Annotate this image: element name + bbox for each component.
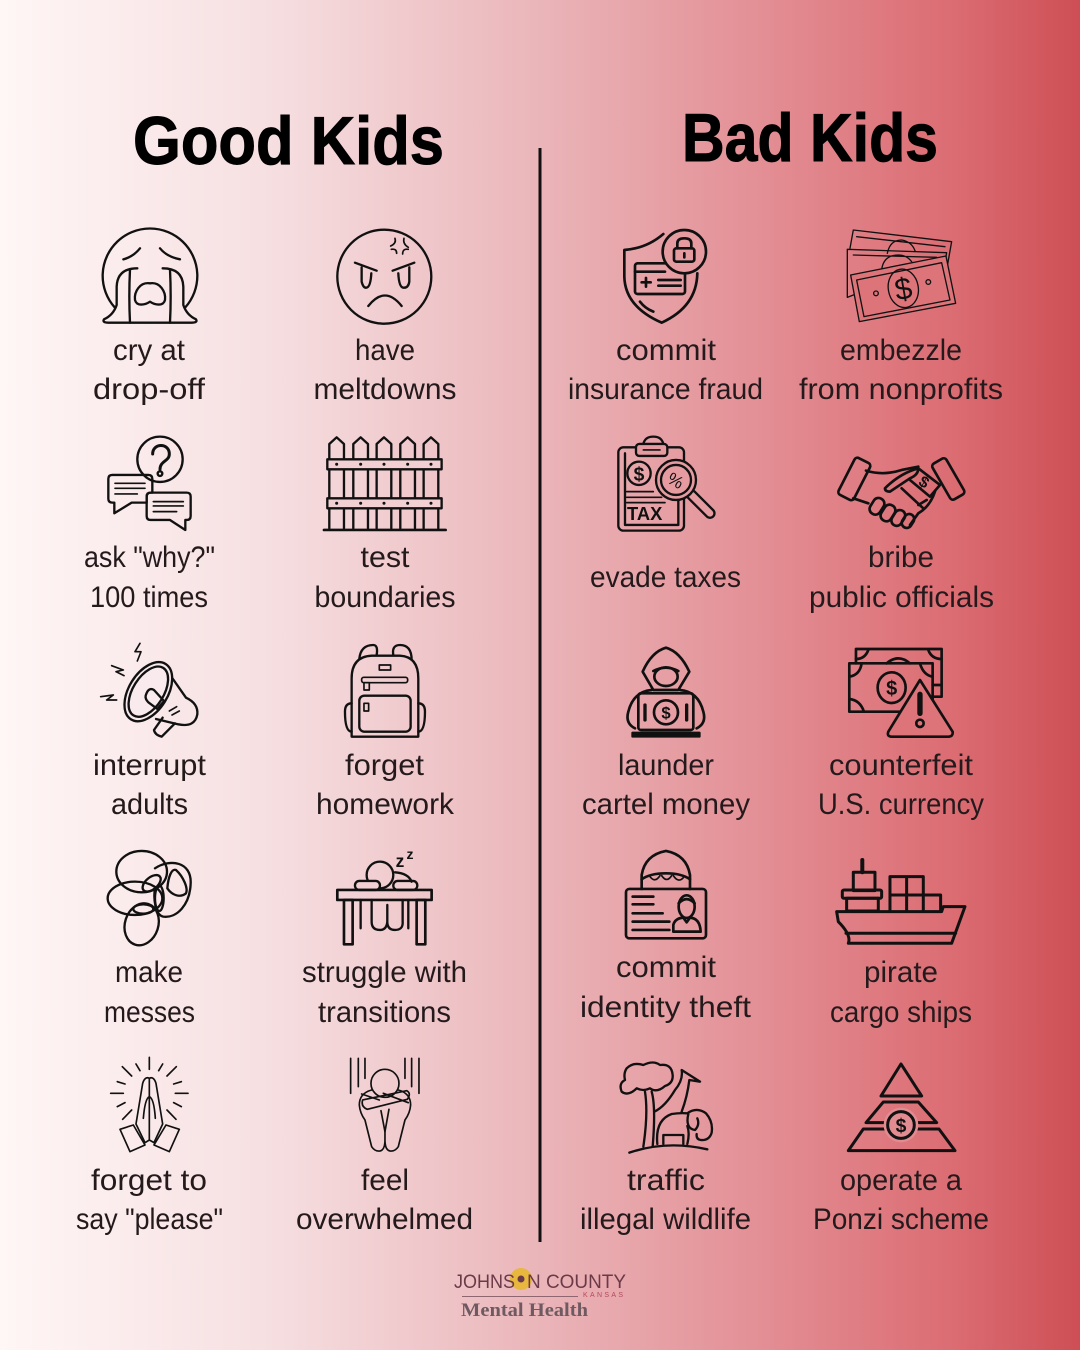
label: make messes: make: [115, 956, 183, 989]
label: feel overwhelmed: [296, 1164, 473, 1236]
icon: tree giraffe elephant: [621, 1062, 712, 1153]
icon: hooded hacker laptop: [627, 648, 704, 736]
label: struggle with transitions: struggle with: [302, 956, 467, 989]
icon: tax clipboard with magnifier: $: [634, 464, 645, 485]
label: traffic illegal wildlife: traffic: [627, 1164, 705, 1197]
label: ask why 100 times: 100 times: [90, 581, 208, 614]
panel: good kids: [76, 229, 473, 1236]
label: interrupt adults: interrupt: [93, 749, 207, 782]
label: forget to say please: [76, 1164, 223, 1236]
label: make messes: messes: [104, 996, 195, 1029]
icon: praying hands: [111, 1057, 188, 1152]
label: counterfeit US currency: U.S. currency: [818, 788, 984, 821]
label: launder cartel money: launder: [618, 749, 714, 782]
logo: Johnson County Mental Health: Mental Health: [461, 1300, 588, 1321]
icon: megaphone: [101, 643, 197, 737]
icon: question speech bubbles: [108, 437, 191, 530]
icon: shield with card and lock: [624, 230, 706, 323]
icon: handshake with money: [837, 457, 966, 530]
label: have meltdowns: meltdowns: [314, 373, 456, 406]
label: test boundaries: boundaries: [314, 581, 456, 614]
label: have meltdowns: [314, 334, 456, 406]
label: forget to say please: forget to: [91, 1164, 207, 1197]
icon: tax clipboard with magnifier: [618, 437, 710, 531]
icon: fence: [324, 437, 446, 530]
label: traffic illegal wildlife: [580, 1164, 751, 1236]
icon: sleeping at desk: z: [406, 846, 413, 862]
heading: Bad Kids: Bad Kids: [682, 100, 938, 176]
label: operate a Ponzi scheme: operate a: [840, 1164, 962, 1197]
icon: stacked money: [847, 230, 956, 322]
label: make messes: [104, 956, 195, 1029]
icon: stacked money: $: [892, 271, 915, 308]
label: interrupt adults: adults: [111, 788, 188, 821]
label: ask why 100 times: ask "why?": [84, 541, 215, 574]
label: have meltdowns: have: [355, 334, 415, 367]
label: commit identity theft: commit: [616, 951, 717, 984]
label: struggle with transitions: transitions: [318, 996, 451, 1029]
label: forget homework: [316, 749, 455, 821]
icon: tax clipboard with magnifier: TAX: [627, 503, 663, 524]
icon: counterfeit money warning: $: [886, 678, 897, 700]
label: evade taxes: evade taxes: [590, 561, 741, 594]
icon: backpack: [345, 645, 425, 737]
label: feel overwhelmed: overwhelmed: [296, 1203, 473, 1236]
label: embezzle from nonprofits: embezzle: [840, 334, 962, 367]
icon: cargo ship: [837, 860, 965, 943]
label: test boundaries: [314, 541, 456, 614]
icon: ponzi pyramid: $: [896, 1116, 907, 1137]
logo: Johnson County Mental Health: N COUNTY: [527, 1272, 626, 1293]
label: pirate cargo ships: pirate: [864, 956, 938, 989]
label: forget homework: homework: [316, 788, 455, 821]
icon: handshake with money: $: [915, 473, 932, 493]
label: commit identity theft: identity theft: [580, 991, 752, 1024]
icon: ponzi pyramid: [848, 1064, 955, 1151]
label: commit identity theft: [580, 951, 752, 1024]
icon: counterfeit money warning: [849, 649, 953, 737]
icon: overwhelmed figure: [351, 1058, 419, 1151]
label: commit insurance fraud: commit: [616, 334, 717, 367]
label: launder cartel money: [582, 749, 750, 821]
label: forget homework: forget: [345, 749, 425, 782]
icon: scribble: [108, 851, 191, 950]
label: cry at drop-off: drop-off: [93, 373, 206, 406]
icon: sleeping at desk: z: [396, 851, 405, 871]
label: operate a Ponzi scheme: Ponzi scheme: [813, 1203, 989, 1236]
icon: hooded hacker laptop: $: [661, 703, 671, 722]
center divider: [538, 148, 542, 1242]
icon: crying face: [103, 229, 197, 323]
label: launder cartel money: cartel money: [582, 788, 750, 821]
label: embezzle from nonprofits: from nonprofits: [799, 373, 1003, 406]
icon: identity card thief: [626, 851, 706, 938]
label: feel overwhelmed: feel: [361, 1164, 409, 1197]
label: pirate cargo ships: cargo ships: [830, 996, 972, 1029]
label: struggle with transitions: [302, 956, 467, 1029]
logo: Johnson County Mental Health: JOHNS: [454, 1272, 515, 1293]
icon: tax clipboard with magnifier: %: [664, 468, 687, 493]
label: counterfeit US currency: counterfeit: [829, 749, 974, 782]
label: cry at drop-off: [93, 334, 206, 406]
label: interrupt adults: [93, 749, 207, 821]
label: forget to say please: say "please": [76, 1203, 223, 1236]
label: ask why 100 times: [84, 541, 215, 614]
label: embezzle from nonprofits: [799, 334, 1003, 406]
label: traffic illegal wildlife: illegal wildlife: [580, 1203, 751, 1236]
label: commit insurance fraud: [568, 334, 763, 406]
label: operate a Ponzi scheme: [813, 1164, 989, 1236]
label: counterfeit US currency: [818, 749, 984, 821]
label: bribe public officials: bribe: [868, 541, 934, 574]
label: bribe public officials: [809, 541, 994, 614]
label: commit insurance fraud: insurance fraud: [568, 373, 763, 406]
label: cry at drop-off: cry at: [113, 334, 186, 367]
panel: bad kids: [568, 230, 1003, 1236]
label: bribe public officials: public officials: [809, 581, 994, 614]
icon: angry face: [337, 230, 431, 324]
heading: Good Kids: Good Kids: [133, 103, 444, 179]
logo: Johnson County Mental Health: [454, 1268, 626, 1321]
icon: sleeping at desk: [337, 846, 432, 944]
label: test boundaries: test: [360, 541, 410, 574]
logo: Johnson County Mental Health: KANSAS: [583, 1292, 623, 1299]
label: pirate cargo ships: [830, 956, 972, 1029]
